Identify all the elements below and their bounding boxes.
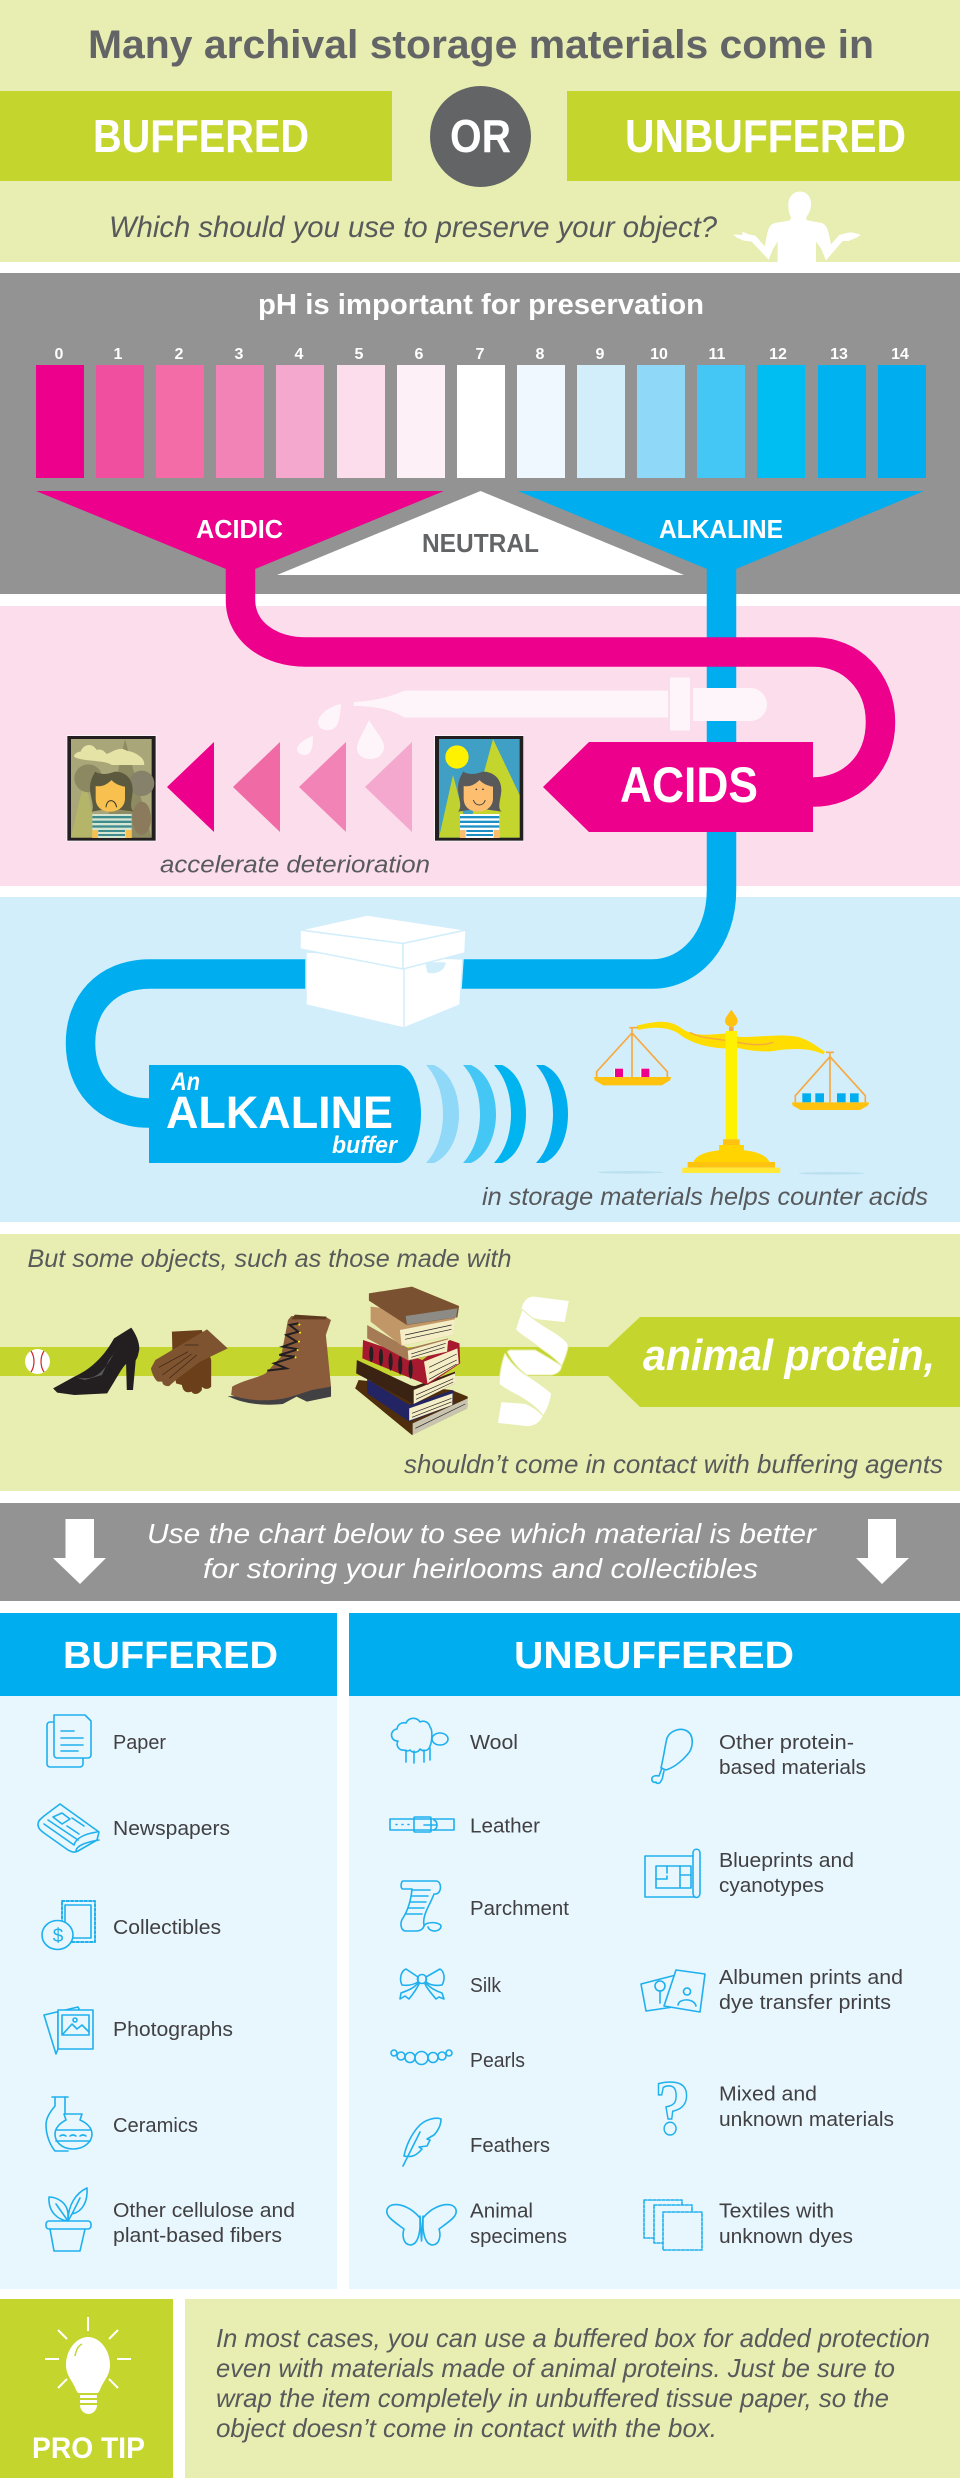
icon: stack of books xyxy=(355,1287,468,1435)
triangle: neutral xyxy=(277,491,684,575)
tag: acids xyxy=(543,742,813,832)
caption: in storage materials: in storage materials helps counter acids xyxy=(482,1183,928,1211)
icon: balance scale xyxy=(594,1010,869,1175)
item: mixed and unknown materials: Mixed and xyxy=(719,2084,817,2106)
item: cellulose and plant fibers: plant-based fibers xyxy=(113,2225,282,2247)
icon: shrugging person silhouette xyxy=(733,192,861,262)
pH scale numbers: 13 xyxy=(830,346,848,363)
item: leather xyxy=(390,1816,540,1838)
item: albumen and dye transfer prints xyxy=(641,1967,903,2014)
icon: baseball xyxy=(25,1349,50,1374)
item: blueprints and cyanotypes: Blueprints and xyxy=(719,1850,854,1872)
question text: Which should you use to preserve your object? xyxy=(109,211,717,244)
item: pearls xyxy=(391,2050,525,2072)
item: textiles with unknown dyes xyxy=(644,2200,853,2250)
banner: unbuffered: UNBUFFERED xyxy=(625,110,906,162)
item: feathers: Feathers xyxy=(470,2135,550,2157)
picture: healthy portrait xyxy=(434,735,524,841)
pH scale numbers: 5 xyxy=(355,346,364,363)
funnel: alkaline xyxy=(518,491,924,569)
text: use the chart: Use the chart below to see which material is better xyxy=(147,1518,818,1549)
tag: alkaline buffer xyxy=(149,1065,421,1163)
item: wool: Wool xyxy=(470,1732,518,1754)
item: mixed and unknown materials xyxy=(654,2064,894,2151)
pH scale numbers: 8 xyxy=(536,346,545,363)
arrow: left down xyxy=(53,1519,106,1584)
panel: unbuffered column xyxy=(349,1613,960,2289)
item: paper xyxy=(47,1715,166,1767)
triangle: neutral: NEUTRAL xyxy=(422,528,539,558)
item: ceramics: Ceramics xyxy=(113,2115,198,2137)
icon: protein helix ribbon xyxy=(497,1296,569,1427)
caption: accelerate deterioration: accelerate deterioration xyxy=(160,852,430,878)
item: animal specimens xyxy=(387,2200,567,2248)
item: mixed and unknown materials: unknown materials xyxy=(719,2109,894,2131)
arrows: deterioration chevrons xyxy=(167,742,412,832)
item: textiles with unknown dyes: Textiles with xyxy=(719,2200,834,2222)
item: paper: Paper xyxy=(113,1732,166,1754)
pH scale numbers: 2 xyxy=(175,346,184,363)
item: photographs xyxy=(44,2007,233,2054)
tag: animal protein xyxy=(0,1317,960,1407)
pH scale numbers: 1 xyxy=(114,346,123,363)
icon: buffer waves xyxy=(426,1065,568,1163)
item: ceramics xyxy=(46,2097,198,2151)
tag: alkaline buffer: buffer xyxy=(332,1132,399,1159)
panel: pro tip badge xyxy=(0,2299,173,2478)
pH colour bars xyxy=(36,365,926,478)
item: other protein-based materials: based materials xyxy=(719,1757,866,1779)
panel: alkaline background xyxy=(0,897,960,1222)
item: silk xyxy=(400,1969,502,1999)
icon: falling drops xyxy=(297,704,384,759)
heading: unbuffered xyxy=(349,1613,960,1696)
item: textiles with unknown dyes: unknown dyes xyxy=(719,2226,853,2248)
pH scale numbers: 14 xyxy=(891,346,909,363)
panel: animal protein xyxy=(0,1234,960,1491)
panel: pro tip text: wrap the item completely in unbuffered tissue paper, so the xyxy=(216,2383,889,2413)
banner: buffered xyxy=(0,91,392,181)
item: other protein-based materials: Other protein- xyxy=(719,1732,854,1754)
tag: alkaline buffer: ALKALINE xyxy=(166,1087,393,1138)
item: other protein-based materials xyxy=(652,1729,866,1783)
pH scale numbers: 7 xyxy=(476,346,485,363)
pH scale numbers: 3 xyxy=(235,346,244,363)
item: cellulose and plant fibers: Other cellulose and xyxy=(113,2200,295,2222)
pipe: alkaline blue xyxy=(80,565,722,1113)
text: but some objects: But some objects, such as those made with xyxy=(28,1245,511,1273)
pH scale numbers: 12 xyxy=(769,346,787,363)
item: newspapers xyxy=(38,1804,230,1852)
item: collectibles xyxy=(42,1901,221,1950)
panel: pro tip text xyxy=(185,2299,960,2478)
icon: storage box xyxy=(300,915,466,1028)
funnel: acidic xyxy=(36,491,444,569)
pH heading: pH is important for preservation xyxy=(258,289,704,321)
item: cellulose and plant fibers xyxy=(46,2188,295,2251)
panel: buffered column xyxy=(0,1613,337,2289)
panel: pro tip text: In most cases, you can use a buffered box for added protection xyxy=(216,2323,930,2353)
icon: leather gloves xyxy=(151,1329,228,1394)
funnel: acidic: ACIDIC xyxy=(196,514,283,544)
arrow: right down xyxy=(856,1519,909,1584)
panel: intro header xyxy=(0,0,960,262)
item: blueprints and cyanotypes xyxy=(645,1849,854,1898)
item: feathers xyxy=(403,2118,550,2166)
picture: deteriorated portrait xyxy=(67,735,156,841)
pH scale numbers: 9 xyxy=(596,346,605,363)
pro tip label: PRO TIP xyxy=(32,2432,145,2465)
icon: dropper xyxy=(354,678,767,730)
panel: pH background xyxy=(0,273,960,594)
panel: pro tip text: even with materials made of animal proteins. Just be sure to xyxy=(216,2353,895,2383)
item: albumen and dye transfer prints: dye transfer prints xyxy=(719,1992,891,2014)
tag: animal protein: animal protein, xyxy=(643,1331,935,1380)
item: collectibles: Collectibles xyxy=(113,1917,221,1939)
panel: chart instruction xyxy=(0,1503,960,1601)
pH scale numbers: 10 xyxy=(650,346,668,363)
item: photographs: Photographs xyxy=(113,2019,233,2041)
item: newspapers: Newspapers xyxy=(113,1818,230,1840)
heading: unbuffered: UNBUFFERED xyxy=(514,1635,794,1677)
item: pearls: Pearls xyxy=(470,2050,525,2072)
item: animal specimens: Animal xyxy=(470,2200,533,2222)
pipe: acid magenta xyxy=(240,565,880,792)
item: leather: Leather xyxy=(470,1816,540,1838)
icon: light bulb xyxy=(45,2317,131,2414)
item: collectibles: $ xyxy=(53,1926,64,1947)
heading: buffered: BUFFERED xyxy=(63,1635,278,1677)
pH scale numbers: 4 xyxy=(295,346,304,363)
icon: high heel shoe xyxy=(53,1328,139,1395)
item: parchment: Parchment xyxy=(470,1898,569,1920)
heading: buffered xyxy=(0,1613,337,1696)
pH scale numbers xyxy=(55,346,909,363)
item: animal specimens: specimens xyxy=(470,2226,567,2248)
badge: or: OR xyxy=(450,110,511,162)
item: parchment xyxy=(401,1881,569,1931)
funnel: alkaline: ALKALINE xyxy=(659,514,783,544)
panel: acids background xyxy=(0,606,960,886)
pH scale numbers: 6 xyxy=(415,346,424,363)
banner: unbuffered xyxy=(567,91,960,181)
title: Many archival storage materials come in xyxy=(88,23,874,67)
icon: lace-up boot xyxy=(228,1315,331,1405)
item: wool xyxy=(392,1718,518,1763)
text: use the chart: for storing your heirlooms and collectibles xyxy=(203,1553,758,1584)
tag: alkaline buffer: An xyxy=(170,1068,200,1096)
pH scale numbers: 0 xyxy=(55,346,64,363)
pH scale numbers: 11 xyxy=(709,346,726,363)
item: mixed and unknown materials: ? xyxy=(654,2064,691,2151)
panel: pro tip text: object doesn’t come in contact with the box. xyxy=(216,2413,717,2443)
text: shouldn't come in contact: shouldn’t come in contact with buffering agents xyxy=(404,1449,943,1479)
tag: acids: ACIDS xyxy=(620,757,758,813)
item: albumen and dye transfer prints: Albumen prints and xyxy=(719,1967,903,1989)
text: use the chart xyxy=(147,1518,818,1584)
banner: buffered: BUFFERED xyxy=(93,110,309,162)
badge: or xyxy=(430,86,531,187)
item: blueprints and cyanotypes: cyanotypes xyxy=(719,1875,824,1897)
item: silk: Silk xyxy=(470,1975,502,1997)
